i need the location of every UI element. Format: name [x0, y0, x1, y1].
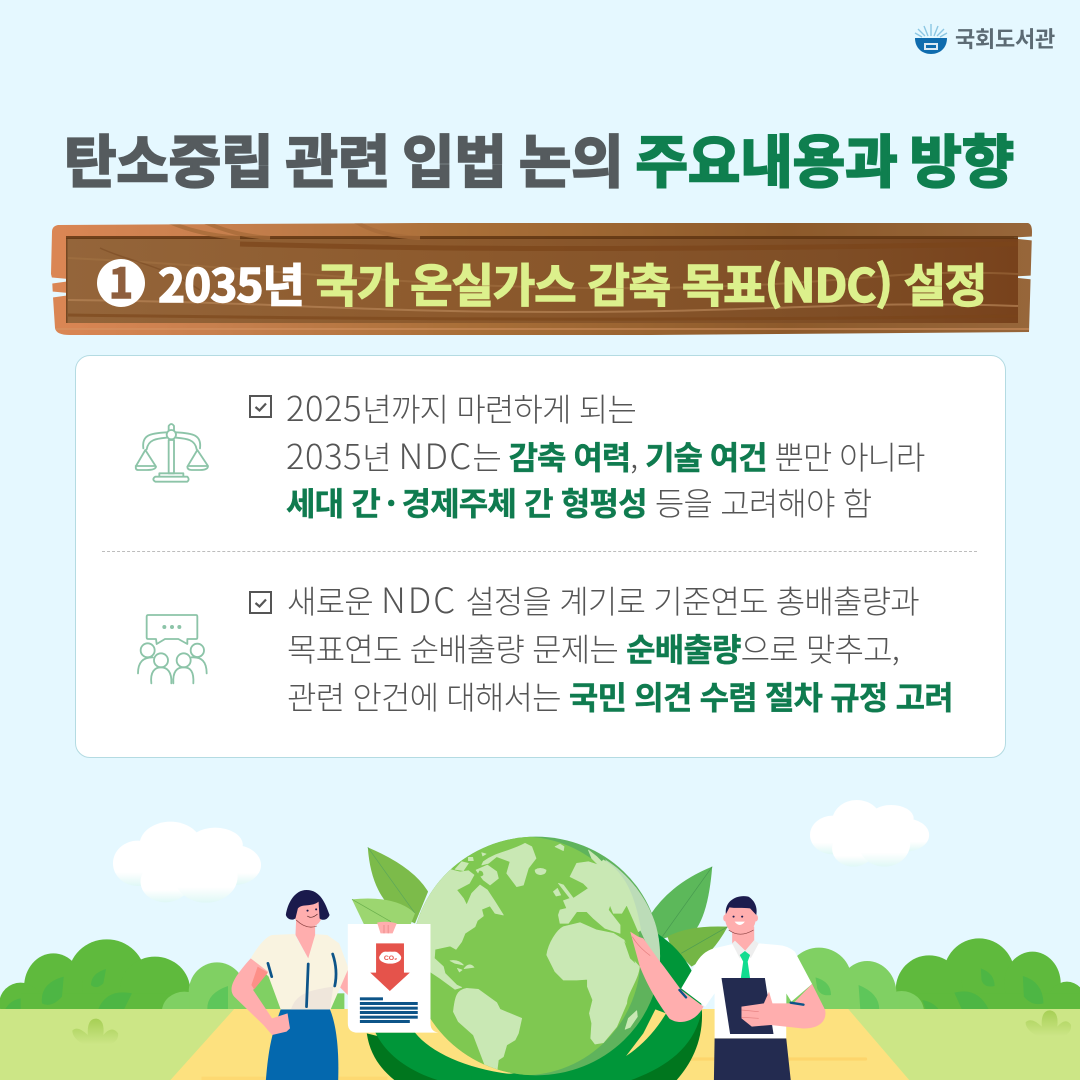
woman body — [339, 967, 350, 997]
item 2 line 1: 새로운 NDC 설정을 계기로 기준연도 총배출량과 — [287, 573, 919, 624]
item 2 line 2: 목표연도 순배출량 문제는 순배출량으로 맞추고, — [287, 625, 899, 671]
title: 탄소중립 관련 입법 논의 주요내용과 방향 — [64, 117, 1014, 199]
wooden sign banner — [51, 223, 1032, 335]
document — [348, 924, 441, 1033]
text block: item 2 — [287, 573, 953, 719]
banner heading: 2035년 국가 온실가스 감축 목표(NDC) 설정 — [158, 250, 986, 316]
item 1 line 3: 세대 간·경제주체 간 형평성 등을 고려해야 함 — [286, 479, 871, 525]
checkbox 2 — [249, 591, 272, 614]
wood board — [51, 223, 1032, 335]
badge numeral: 1 — [109, 250, 133, 310]
man with clipboard — [630, 896, 825, 1080]
continents — [410, 843, 641, 1073]
item 2 line 3: 관련 안건에 대해서는 국민 의견 수렴 절차 규정 고려 — [287, 673, 953, 719]
panel: content card — [75, 355, 1006, 758]
clouds — [113, 800, 929, 903]
text block: item 1 — [286, 381, 924, 525]
logo emblem — [914, 24, 948, 54]
divider — [102, 551, 977, 552]
illustration: landscape, globe and people — [0, 800, 1080, 1080]
grass tufts — [72, 1010, 1071, 1045]
number badge — [97, 259, 145, 307]
bushes — [0, 938, 1080, 1032]
icon: balance scale — [134, 423, 209, 483]
woman holding document: CO₂ — [384, 955, 397, 962]
checkbox 1 — [249, 395, 272, 418]
leaf cradle under globe — [367, 933, 702, 1080]
item 1 line 2: 2035년 NDC는 감축 여력, 기술 여건 뿐만 아니라 — [286, 429, 924, 480]
woman holding document — [232, 890, 441, 1080]
leaves behind globe — [352, 847, 728, 967]
globe — [406, 837, 662, 1075]
ground and path — [0, 1009, 1080, 1080]
item 1 line 1: 2025년까지 마련하게 되는 — [286, 381, 636, 431]
logo: National Assembly Library — [914, 22, 1055, 54]
icon: people discussing — [137, 614, 208, 684]
logo text: 국회도서관 — [955, 22, 1055, 54]
